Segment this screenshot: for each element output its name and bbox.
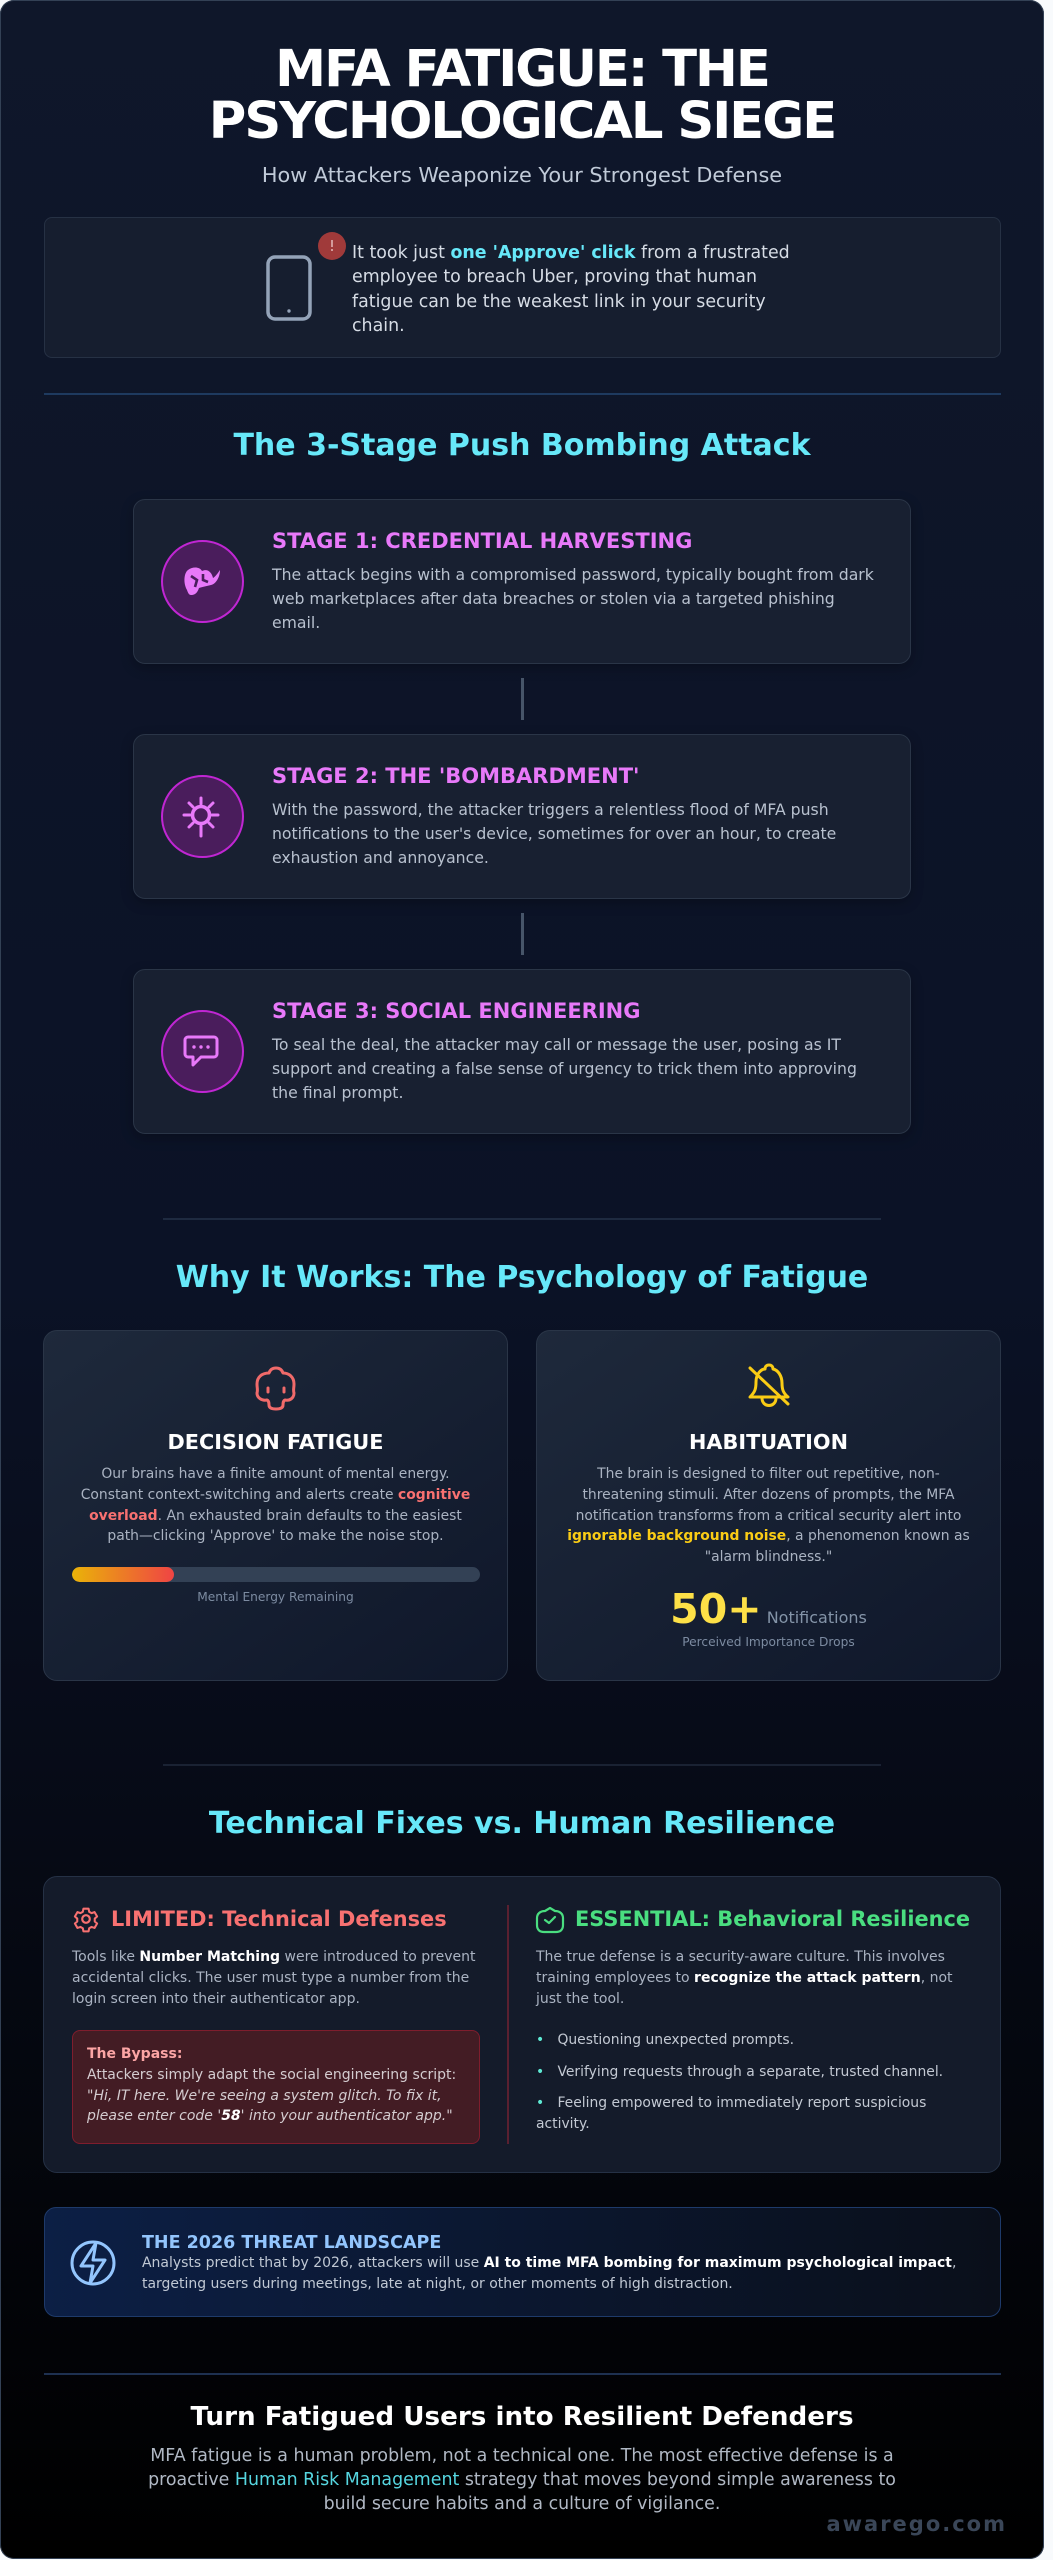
column text: just the tool. — [536, 1991, 624, 2007]
subtitle: How Attackers Weaponize Your Strongest Defense — [262, 163, 782, 187]
stage text: notifications to the user's device, sometimes for over an hour, to create — [272, 824, 836, 843]
column text: training employees to recognize the attack pattern, not — [536, 1970, 953, 1986]
icon: bolt circle — [70, 2240, 116, 2286]
stage text — [272, 800, 836, 867]
closing text: build secure habits and a culture of vigilance. — [324, 2494, 720, 2514]
column text: Tools like Number Matching were introduced to prevent — [72, 1949, 476, 1965]
panel: stage 1 — [133, 499, 911, 664]
icon: shield check — [536, 1906, 564, 1934]
card text: ignorable background noise, a phenomenon known as — [567, 1528, 970, 1544]
closing text: MFA fatigue is a human problem, not a technical one. The most effective defense is a — [150, 2446, 894, 2466]
divider — [163, 1218, 881, 1220]
title: PSYCHOLOGICAL SIEGE — [209, 91, 835, 151]
column text: accidental clicks. The user must type a number from the — [72, 1970, 469, 1986]
closing text: proactive Human Risk Management strategy that moves beyond simple awareness to — [148, 2470, 896, 2490]
threat text: targeting users during meetings, late at night, or other moments of high distraction. — [142, 2276, 733, 2292]
column title: ESSENTIAL: Behavioral Resilience — [575, 1907, 970, 1931]
bar label: Mental Energy Remaining — [197, 1590, 354, 1604]
stage text: The attack begins with a compromised password, typically bought from dark — [272, 565, 874, 584]
connector — [521, 913, 524, 955]
panel: stage 3 — [133, 969, 911, 1134]
hero text: employee to breach Uber, proving that human — [352, 267, 757, 287]
heading: psychology: Why It Works: The Psychology of Fatigue — [176, 1260, 868, 1295]
card title: DECISION FATIGUE — [168, 1430, 383, 1454]
stage text: To seal the deal, the attacker may call or message the user, posing as IT — [272, 1035, 841, 1054]
vertical divider — [507, 1905, 509, 2144]
icon: burst gear — [161, 775, 244, 858]
card text: threatening stimuli. After dozens of prompts, the MFA — [582, 1487, 954, 1503]
heading: fixes: Technical Fixes vs. Human Resilience — [209, 1806, 835, 1841]
hero text — [352, 243, 790, 336]
hero text: It took just one 'Approve' click from a frustrated — [352, 243, 790, 263]
stage title: STAGE 2: THE 'BOMBARDMENT' — [272, 764, 639, 788]
threat title: THE 2026 THREAT LANDSCAPE — [142, 2233, 441, 2253]
stage title: STAGE 3: SOCIAL ENGINEERING — [272, 999, 640, 1023]
hero text: fatigue can be the weakest link in your security — [352, 292, 766, 312]
divider — [44, 393, 1001, 395]
bypass text: "Hi, IT here. We're seeing a system glitch. To fix it, — [87, 2088, 442, 2104]
stage text: email. — [272, 613, 320, 632]
title — [209, 39, 835, 151]
card text: Our brains have a finite amount of mental energy. — [101, 1466, 450, 1482]
bullet 3: • Feeling empowered to immediately report suspicious — [536, 2095, 926, 2111]
title: MFA FATIGUE: THE — [275, 39, 769, 99]
stage text: With the password, the attacker triggers a relentless flood of MFA push — [272, 800, 829, 819]
divider — [44, 2373, 1001, 2375]
bullet 2: • Verifying requests through a separate, trusted channel. — [536, 2064, 943, 2080]
panel: 2026 threat landscape — [44, 2207, 1001, 2317]
progress bar: mental energy — [72, 1567, 480, 1582]
icon: bell off — [748, 1364, 790, 1407]
stage text: web marketplaces after data breaches or stolen via a targeted phishing — [272, 589, 835, 608]
icon: fingerprint blob — [161, 540, 244, 623]
card text — [567, 1466, 970, 1565]
card text: overload. An exhausted brain defaults to the easiest — [89, 1508, 462, 1524]
callout: the bypass — [72, 2030, 480, 2144]
stage title: STAGE 1: CREDENTIAL HARVESTING — [272, 529, 692, 553]
stage text: support and creating a false sense of urgency to trick them into approving — [272, 1059, 857, 1078]
bypass text: please enter code '58' into your authenticator app." — [87, 2108, 453, 2124]
card text: The brain is designed to filter out repetitive, non- — [597, 1466, 940, 1482]
bypass text: The Bypass: — [87, 2046, 182, 2062]
card text: path—clicking 'Approve' to make the noise stop. — [107, 1528, 444, 1544]
panel: habituation — [536, 1330, 1001, 1681]
card text: Constant context-switching and alerts create cognitive — [81, 1487, 470, 1503]
stage text — [272, 1035, 857, 1102]
closing text — [148, 2446, 896, 2514]
threat text: Analysts predict that by 2026, attackers will use AI to time MFA bombing for maximum psychological impact, — [142, 2255, 956, 2271]
threat text — [142, 2255, 956, 2292]
bypass text: Attackers simply adapt the social engineering script: — [87, 2067, 456, 2083]
icon: brain — [256, 1366, 296, 1410]
bullet 1: • Questioning unexpected prompts. — [536, 2032, 794, 2048]
closing heading: Turn Fatigued Users into Resilient Defenders — [190, 2402, 854, 2432]
divider — [163, 1764, 881, 1766]
hero text: chain. — [352, 316, 405, 336]
stage text: exhaustion and annoyance. — [272, 848, 489, 867]
column title: LIMITED: Technical Defenses — [111, 1907, 447, 1931]
icon: phone with alert — [266, 232, 346, 321]
stat label: Perceived Importance Drops — [682, 1635, 855, 1649]
column text — [72, 1949, 476, 2007]
stage text — [272, 565, 874, 632]
heading: 3-stage: The 3-Stage Push Bombing Attack — [233, 428, 811, 463]
column: technical — [72, 1907, 480, 2144]
panel: stage 2 — [133, 734, 911, 899]
connector — [521, 678, 524, 720]
card title: HABITUATION — [689, 1430, 848, 1454]
icon: chat bubble — [161, 1010, 244, 1093]
watermark: awarego.com — [826, 2512, 1007, 2536]
panel: hero callout — [44, 217, 1001, 358]
card text — [81, 1466, 470, 1544]
card text: "alarm blindness." — [705, 1549, 832, 1565]
bullet 3 — [536, 2095, 926, 2132]
column text — [536, 1949, 953, 2007]
panel: decision fatigue — [43, 1330, 508, 1681]
stage text: the final prompt. — [272, 1083, 403, 1102]
column text: login screen into their authenticator app. — [72, 1991, 360, 2007]
card text: notification transforms from a critical security alert into — [576, 1508, 961, 1524]
bypass text — [87, 2046, 456, 2124]
bar fill — [72, 1567, 174, 1582]
bullet list — [536, 2032, 943, 2132]
panel: comparison — [43, 1876, 1001, 2173]
column: behavioral — [536, 1906, 970, 2132]
column text: The true defense is a security-aware culture. This involves — [536, 1949, 945, 1965]
stat: 50+ notifications: 50+ Notifications — [670, 1585, 867, 1633]
icon: gear — [74, 1908, 98, 1932]
bullet 3: activity. — [536, 2116, 590, 2132]
